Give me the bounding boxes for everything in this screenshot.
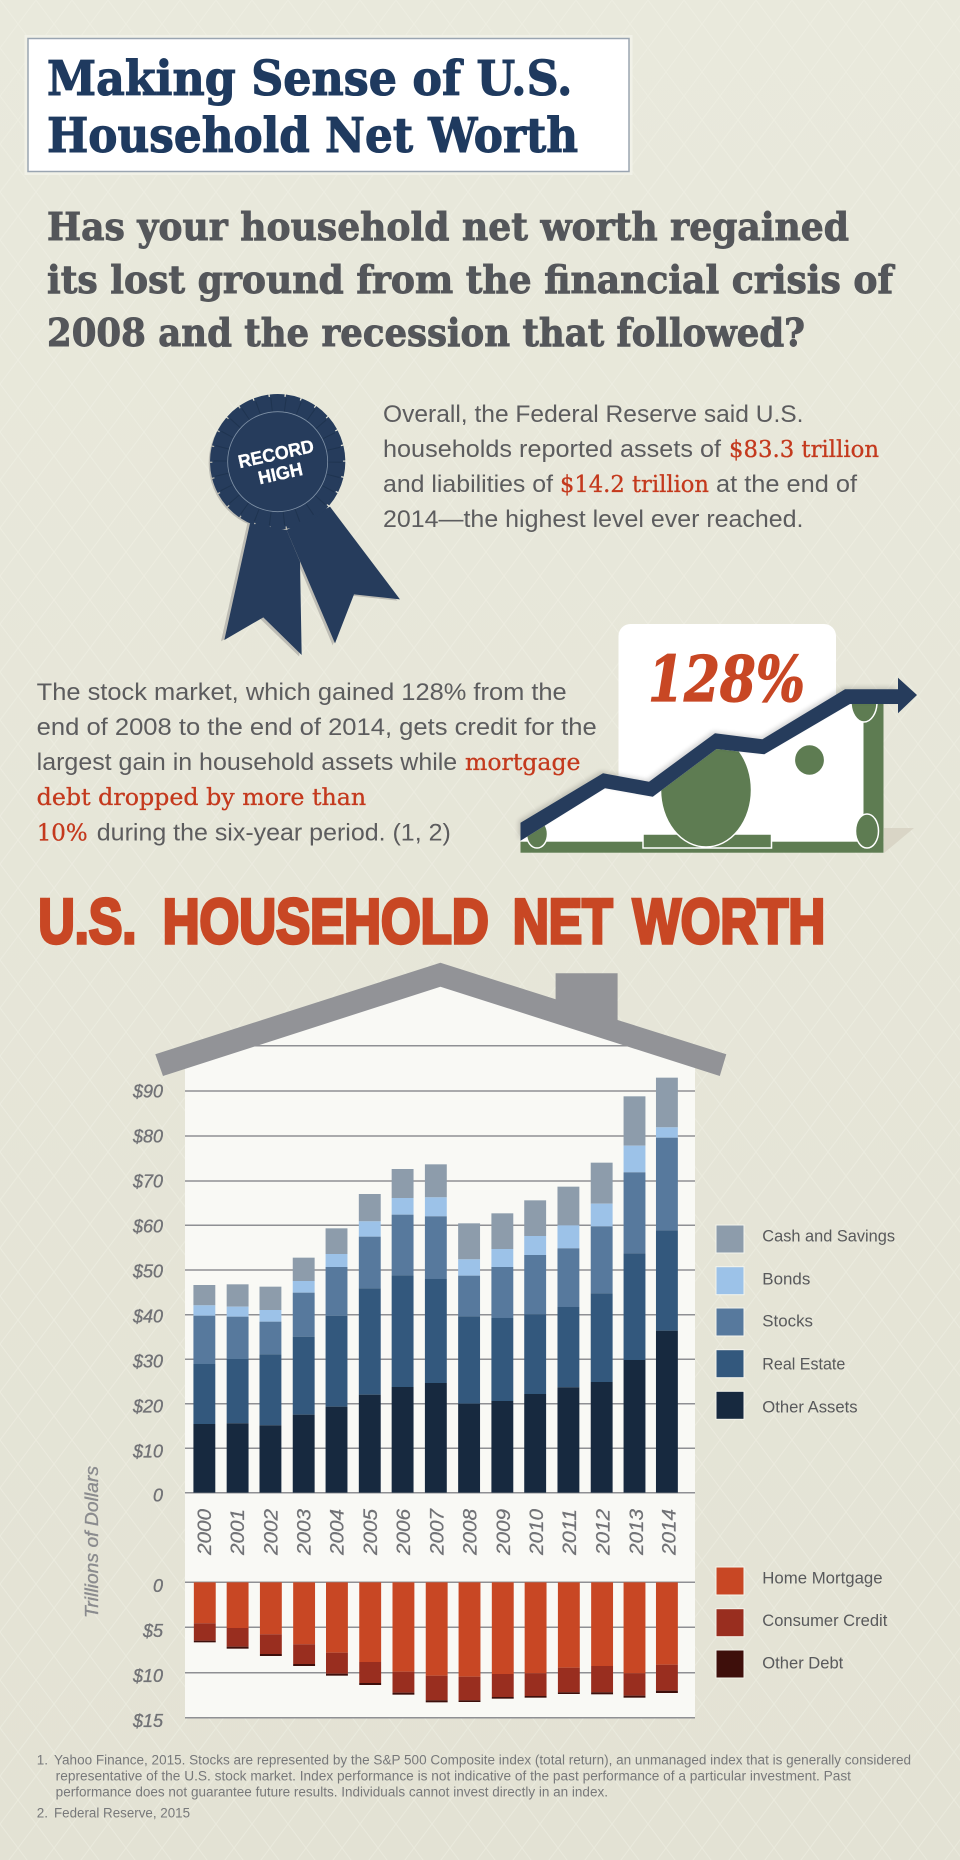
year labels: 2007 (427, 1507, 448, 1556)
bar: 2012 (591, 1163, 613, 1493)
debt bar: 2003 (293, 1582, 315, 1666)
bar: 2003 (293, 1258, 315, 1493)
text block: stock market gain: The stock market, which gained 128% from the (37, 679, 567, 706)
128% figure: 128% (648, 642, 805, 716)
legend: assets: Real Estate (762, 1355, 845, 1373)
year labels: 2000 (195, 1509, 216, 1556)
assets axis labels: $30 (132, 1351, 163, 1371)
bar: 2007 (425, 1164, 447, 1493)
bar: 2009 (491, 1213, 513, 1493)
assets axis labels: $70 (132, 1171, 163, 1191)
debt axis labels: $10 (132, 1666, 163, 1686)
text block: stock market gain: 10% (37, 818, 88, 846)
bar: 2013 (624, 1096, 645, 1493)
bar: 2010 (524, 1200, 546, 1493)
bar: 2004 (326, 1228, 347, 1493)
rosette label (236, 435, 316, 488)
year labels: 2009 (494, 1509, 515, 1556)
legend: assets: Other Assets (762, 1398, 858, 1416)
bar: 2006 (392, 1169, 414, 1493)
ribbon tails (224, 507, 400, 655)
white panel (618, 624, 836, 834)
question heading: Has your household net worth regained (47, 204, 849, 249)
debt axis labels: 0 (153, 1576, 163, 1596)
footnotes (37, 1752, 911, 1820)
year labels: 2001 (228, 1509, 249, 1556)
text block: stock market gain (37, 679, 597, 846)
text block: stock market gain: debt dropped by more than (37, 783, 366, 811)
legend: assets (716, 1225, 895, 1419)
text block: federal reserve assets and liabilities: and liabilities of (383, 471, 553, 498)
chart: house shaped stacked bars (82, 963, 726, 1731)
debt bar: 2008 (459, 1582, 480, 1702)
axis title: Trillions of Dollars (82, 1466, 102, 1618)
footnotes: representative of the U.S. stock market. Index performance is not indicative of the past performance of a particular investment. Past (56, 1769, 851, 1784)
debt bar: 2013 (624, 1582, 645, 1698)
section heading: NET (513, 887, 613, 957)
year labels: 2005 (361, 1509, 382, 1556)
year labels: 2014 (660, 1509, 680, 1556)
footnotes: 2. (37, 1805, 48, 1820)
assets axis labels: $90 (132, 1081, 163, 1101)
rosette (212, 396, 344, 528)
bill shadow (884, 828, 914, 853)
footnotes: Federal Reserve, 2015 (54, 1805, 190, 1820)
text block: federal reserve assets and liabilities (383, 401, 879, 533)
debt bar: 2010 (525, 1582, 547, 1698)
footnotes: Yahoo Finance, 2015. Stocks are represented by the S&P 500 Composite index (total return), an unmanaged index that is generally considered (54, 1752, 911, 1767)
debt axis labels (132, 1576, 164, 1731)
icon: rising arrow (520, 678, 917, 841)
year labels: 2008 (460, 1509, 482, 1556)
assets axis labels: $50 (132, 1261, 163, 1281)
year labels: 2004 (328, 1509, 348, 1556)
year labels: 2006 (394, 1509, 415, 1556)
bar: 2002 (259, 1287, 281, 1493)
section heading: WORTH (633, 887, 825, 957)
bar: 2014 (656, 1078, 678, 1493)
assets axis labels: 0 (153, 1485, 163, 1505)
ribbon shadow (209, 397, 397, 657)
text block: stock market gain: mortgage (465, 748, 580, 776)
assets axis labels: $10 (132, 1441, 163, 1461)
debt bar: 2006 (392, 1582, 414, 1695)
assets axis labels: $20 (132, 1396, 163, 1416)
text block: federal reserve assets and liabilities: households reported assets of (383, 436, 721, 463)
text block: federal reserve assets and liabilities: $83.3 trillion (729, 435, 879, 463)
title box: Household Net Worth (47, 108, 578, 164)
section heading: U.S. (38, 887, 136, 957)
text block: federal reserve assets and liabilities: $14.2 trillion (560, 470, 709, 498)
house body (185, 980, 695, 1718)
asset bars (193, 1078, 678, 1493)
year labels: 2003 (294, 1509, 316, 1556)
bar: 2011 (557, 1187, 579, 1493)
assets axis labels: $40 (132, 1306, 163, 1326)
debt bars (194, 1582, 678, 1702)
debt bar: 2004 (326, 1582, 348, 1676)
legend: assets: Stocks (762, 1313, 813, 1331)
illustration: dollar bill and rising arrow (518, 624, 917, 853)
year labels: 2002 (261, 1509, 282, 1556)
arrow shadow (518, 687, 896, 839)
year labels: 2011 (560, 1509, 581, 1556)
section heading (38, 887, 825, 957)
debt bar: 2007 (426, 1582, 448, 1702)
year labels: 2013 (627, 1509, 648, 1556)
text block: federal reserve assets and liabilities: 2014—the highest level ever reached. (383, 506, 804, 533)
title box (24, 35, 632, 175)
legend: debts: Other Debt (762, 1655, 844, 1673)
debt bar: 2001 (227, 1582, 249, 1649)
legend: debts (716, 1567, 888, 1678)
text block: stock market gain: end of 2008 to the end of 2014, gets credit for the (37, 714, 597, 741)
debt bar: 2000 (194, 1582, 216, 1642)
legend: assets: Cash and Savings (762, 1228, 895, 1246)
assets axis labels: $80 (132, 1126, 163, 1146)
rosette label: RECORD (236, 435, 316, 472)
bar: 2008 (458, 1223, 480, 1493)
title box: Making Sense of U.S. (47, 51, 572, 107)
debt bar: 2005 (359, 1582, 381, 1685)
debt bar: 2012 (591, 1582, 613, 1694)
bar: 2001 (227, 1284, 249, 1493)
bar: 2000 (193, 1285, 215, 1493)
debt bar: 2014 (656, 1582, 678, 1693)
year labels (195, 1507, 680, 1556)
legend: assets: Bonds (762, 1270, 810, 1288)
debt bar: 2011 (558, 1582, 580, 1694)
bill (520, 704, 884, 853)
footnotes: performance does not guarantee future results. Individuals cannot invest directly in an index. (56, 1785, 608, 1800)
debt axis labels: $5 (142, 1621, 164, 1641)
text block: stock market gain: during the six-year period. (1, 2) (97, 820, 451, 846)
legend: debts: Consumer Credit (762, 1612, 888, 1630)
debt bar: 2009 (492, 1582, 514, 1699)
assets axis labels (132, 1081, 163, 1505)
text block: stock market gain: largest gain in household assets while (37, 749, 457, 776)
question heading (47, 204, 896, 355)
question heading: 2008 and the recession that followed? (47, 310, 805, 355)
icon: record high ribbon (209, 396, 400, 657)
roof and chimney (155, 963, 726, 1076)
legend: debts: Home Mortgage (762, 1569, 883, 1587)
rosette label: HIGH (256, 458, 305, 488)
text block: federal reserve assets and liabilities: Overall, the Federal Reserve said U.S. (383, 401, 804, 428)
assets axis labels: $60 (132, 1216, 163, 1236)
text block: federal reserve assets and liabilities: at the end of (716, 471, 857, 498)
debt bar: 2002 (260, 1582, 282, 1656)
section heading: HOUSEHOLD (163, 887, 489, 957)
bar: 2005 (359, 1194, 381, 1493)
year labels: 2010 (527, 1509, 548, 1556)
year labels: 2012 (594, 1509, 614, 1556)
debt axis labels: $15 (132, 1711, 164, 1731)
question heading: its lost ground from the financial crisis of (47, 257, 896, 302)
footnotes: 1. (37, 1752, 48, 1767)
